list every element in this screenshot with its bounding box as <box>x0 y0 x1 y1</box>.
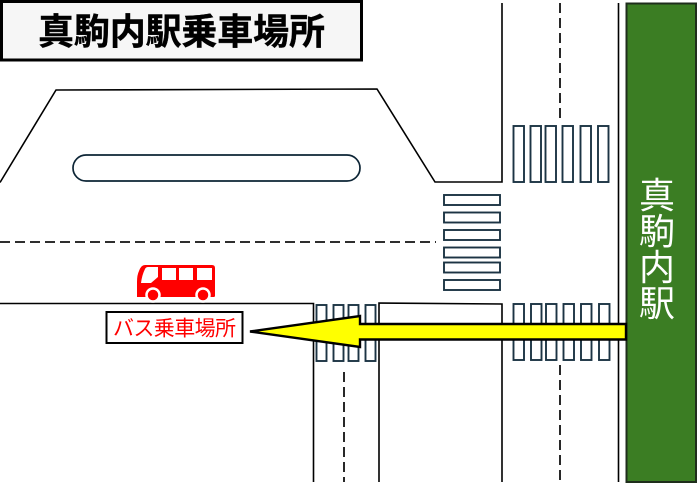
station name <box>639 175 675 324</box>
title: 真駒内駅乗車場所 <box>38 11 325 52</box>
traffic island <box>73 155 360 181</box>
arrow: station to bus stop <box>250 316 626 347</box>
crosswalk: west side <box>316 305 376 361</box>
title <box>2 2 362 60</box>
bus stop label: バス乗車場所 <box>113 318 236 340</box>
crosswalk: south side <box>514 304 610 360</box>
station name: 内 <box>639 247 675 288</box>
bus stop label <box>106 312 242 343</box>
bus wheels <box>146 288 160 302</box>
crosswalk: north side <box>514 126 608 182</box>
road centre dashed lines <box>0 3 560 482</box>
bus windows <box>141 267 158 283</box>
station building <box>626 4 696 482</box>
station name: 駒 <box>639 211 675 252</box>
icon: bus <box>137 265 215 302</box>
crosswalk: east side <box>444 195 500 290</box>
station name: 駅 <box>639 283 675 324</box>
station name: 真 <box>639 175 675 216</box>
